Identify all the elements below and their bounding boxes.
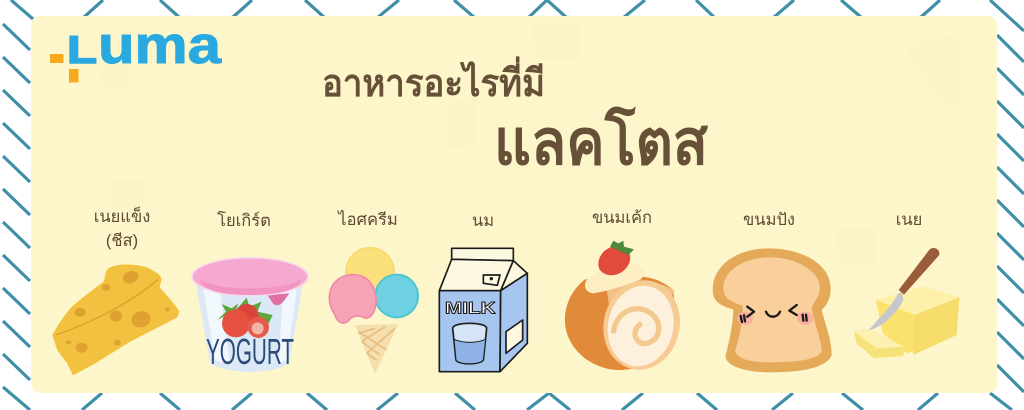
logo: Luma <box>50 16 222 82</box>
icon: milk carton: MILK <box>445 298 496 317</box>
label: ice cream: ไอศครีม <box>336 210 398 229</box>
label: yogurt: โยเกิร์ต <box>217 211 271 230</box>
title: แลคโตส <box>494 105 708 178</box>
logo: Luma: L <box>67 29 97 72</box>
label: bread: ขนมปัง <box>743 211 795 229</box>
label: butter: เนย <box>896 211 922 229</box>
icon: bread slice <box>713 248 832 372</box>
icon: milk carton <box>439 248 527 372</box>
label: hard cheese: (ชีส) <box>106 232 138 250</box>
title: อาหารอะไรที่มี <box>322 56 545 105</box>
icon: yogurt cup <box>192 258 308 372</box>
label: hard cheese: เนยแข็ง <box>94 206 150 226</box>
icon: butter with knife <box>854 248 959 358</box>
icon: ice cream cone <box>329 248 418 374</box>
icon: roll cake <box>565 241 688 377</box>
label: cake: ขนมเค้ก <box>592 209 652 227</box>
label: hard cheese <box>94 206 150 250</box>
icon: cheese <box>53 265 178 374</box>
logo: Luma: uma <box>98 16 222 75</box>
icon: yogurt cup: YOGURT <box>206 331 294 372</box>
label: milk: นม <box>472 212 494 230</box>
title <box>322 56 708 178</box>
